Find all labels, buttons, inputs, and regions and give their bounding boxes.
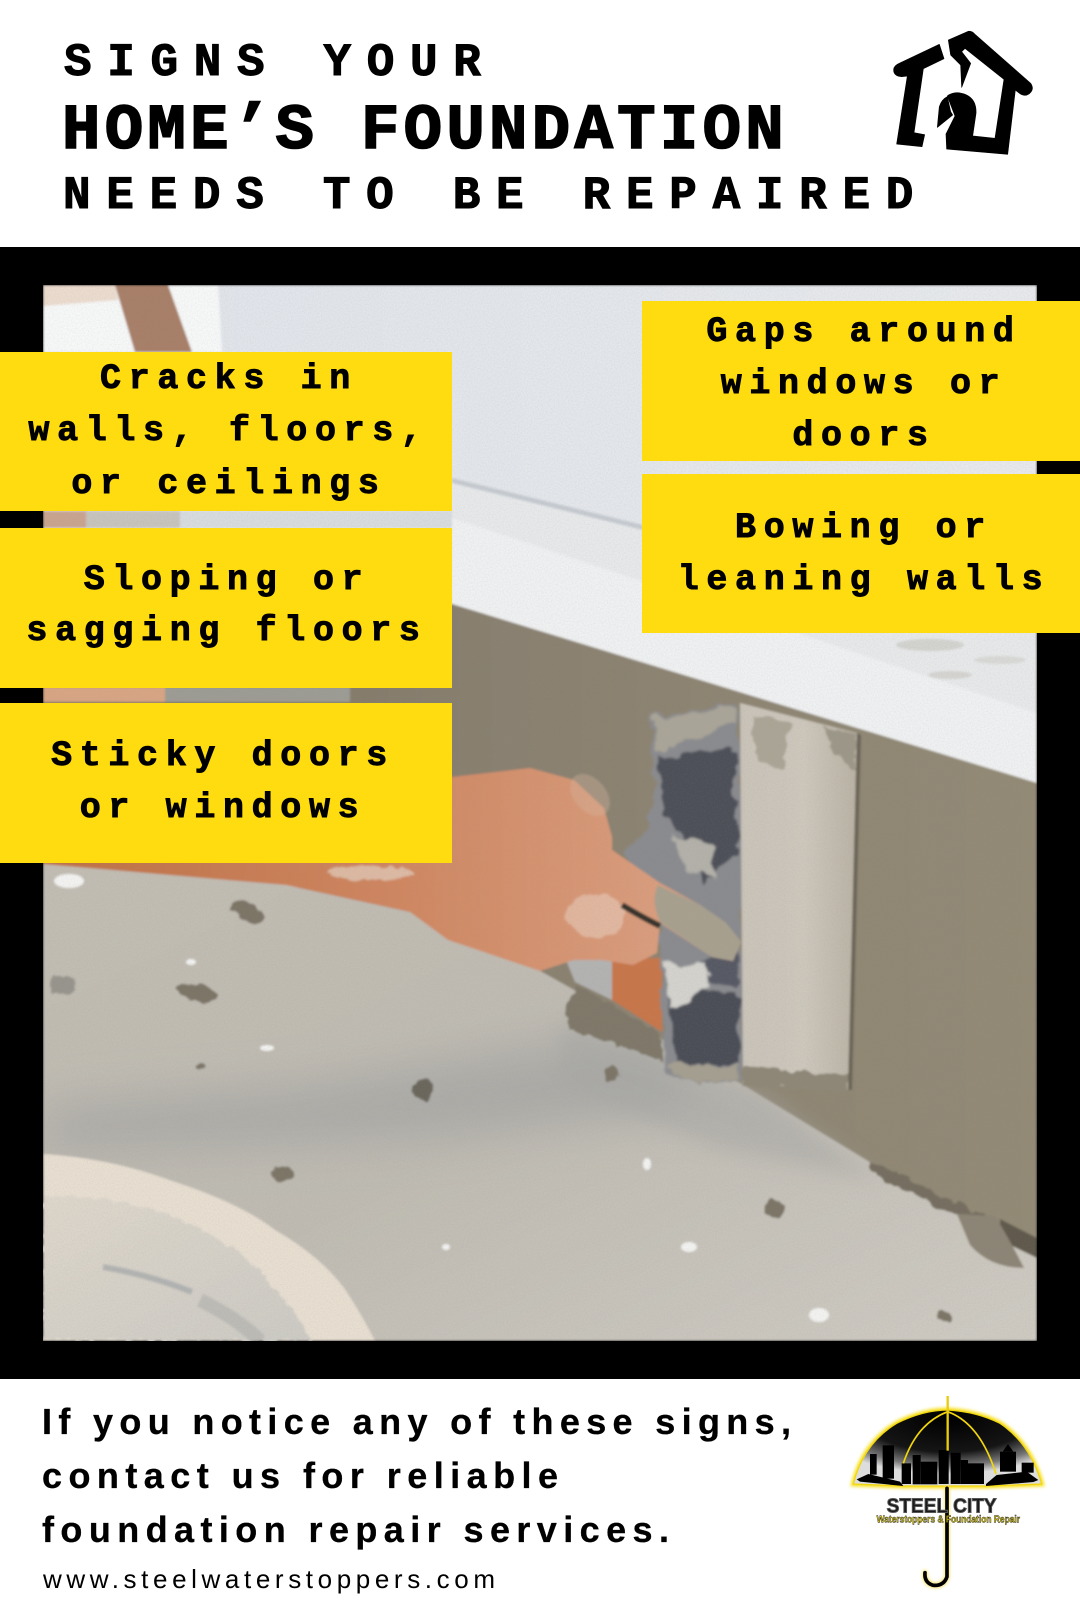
title: SIGNS YOUR bbox=[64, 37, 497, 89]
panel: bowing walls callout: leaning walls bbox=[678, 560, 1050, 600]
logo canopy glow bbox=[853, 1410, 1042, 1486]
closing message bbox=[42, 1401, 791, 1550]
closing message: foundation repair services. bbox=[42, 1509, 669, 1550]
photo sill gap shading bbox=[43, 511, 86, 528]
photo bottom wall strip bbox=[1000, 1219, 1037, 1258]
photo white flecks bbox=[54, 874, 829, 1322]
panel: gaps callout bbox=[642, 301, 1080, 461]
photo trowel dark patches bbox=[658, 745, 738, 1066]
photo sill front bbox=[452, 518, 1037, 783]
photo mortar strip on floor edge bbox=[868, 1162, 985, 1216]
photo sill top bbox=[43, 480, 1037, 783]
photo dust on arm bbox=[328, 866, 412, 880]
photo sill specks bbox=[896, 639, 964, 651]
logo handle bbox=[925, 1488, 947, 1585]
photo floor bbox=[43, 860, 1037, 1341]
logo name: STEEL CITY bbox=[887, 1495, 997, 1518]
photo debris stones bbox=[48, 895, 952, 1321]
photo upper left sky bbox=[43, 285, 222, 352]
photo rusty pole bbox=[115, 285, 192, 352]
photo index fingertip with mortar bbox=[654, 885, 741, 961]
panel: sticky doors callout: or windows bbox=[80, 788, 366, 828]
panel: gaps callout: Gaps around bbox=[706, 312, 1022, 352]
black photo frame band bbox=[0, 247, 1080, 1379]
panel: sticky doors callout bbox=[0, 703, 452, 863]
logo: Steel City umbrella bbox=[853, 1396, 1042, 1585]
photo arm and hand bbox=[43, 768, 741, 971]
closing message: If you notice any of these signs, bbox=[42, 1401, 791, 1442]
panel: cracks callout: Cracks in bbox=[100, 359, 358, 399]
photo finger gap bbox=[622, 905, 660, 926]
logo shaft bbox=[944, 1396, 951, 1451]
photo wall shadow line bbox=[452, 478, 643, 530]
photo bucket bbox=[43, 1154, 375, 1341]
website url: www.steelwaterstoppers.com bbox=[42, 1564, 495, 1594]
panel: gaps callout: doors bbox=[792, 416, 936, 456]
panel: sloping floors callout: Sloping or bbox=[84, 560, 370, 600]
icon: cracked house bbox=[894, 31, 1032, 154]
photo mortar tongue bbox=[957, 1214, 1024, 1268]
logo tagline: Waterstoppers & Foundation Repair bbox=[877, 1515, 1020, 1526]
panel: bowing walls callout: Bowing or bbox=[735, 508, 993, 548]
panel: sticky doors callout: Sticky doors bbox=[51, 736, 395, 776]
closing message: contact us for reliable bbox=[42, 1455, 558, 1496]
panel: cracks callout bbox=[0, 352, 452, 511]
photo taupe wall bbox=[43, 600, 1037, 1256]
photo gap arm section bbox=[43, 687, 165, 702]
photo grain bbox=[43, 285, 1037, 1341]
photo trowel face bbox=[622, 703, 743, 1083]
panel: cracks callout: or ceilings bbox=[71, 464, 387, 504]
photo mesh and mortar heap bbox=[565, 958, 664, 1062]
logo yellow ribs bbox=[903, 1412, 996, 1474]
panel: gaps callout: windows or bbox=[721, 364, 1007, 404]
logo skyline bbox=[857, 1444, 1038, 1486]
photo: hand plastering a foundation wall bbox=[43, 285, 1037, 1341]
panel: bowing walls callout bbox=[642, 474, 1080, 633]
title bbox=[62, 37, 929, 222]
panel: sloping floors callout bbox=[0, 528, 452, 688]
panel: sloping floors callout: sagging floors bbox=[26, 611, 428, 651]
photo trowel blade bbox=[740, 703, 857, 1090]
panel: cracks callout: walls, floors, bbox=[28, 411, 430, 451]
photo background wall bbox=[43, 285, 1037, 529]
photo floor shadow bbox=[43, 1045, 700, 1155]
logo handle glow bbox=[925, 1488, 947, 1585]
title: NEEDS TO BE REPAIRED bbox=[63, 170, 929, 222]
title: HOME’S FOUNDATION bbox=[62, 96, 788, 168]
logo canopy bbox=[853, 1410, 1042, 1486]
photo trowel mortar patches bbox=[652, 706, 738, 1082]
